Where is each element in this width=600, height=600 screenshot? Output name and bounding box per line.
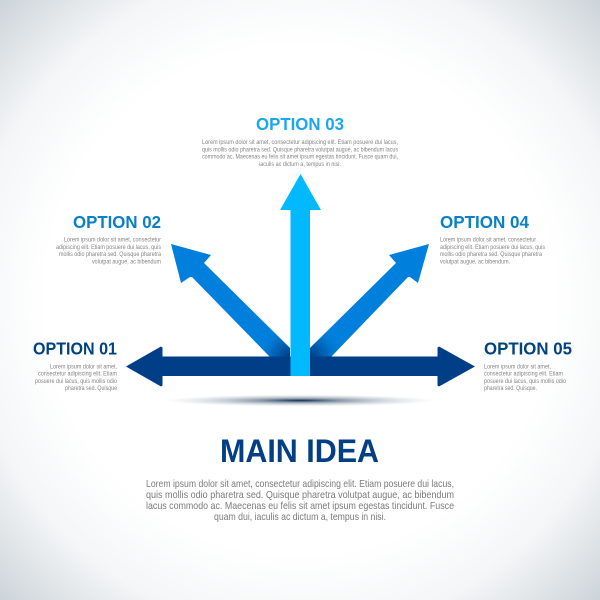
text block: option 03: quis mollis odio pharetra sed. Quisque pharetra volutpat augue, ac bibendum lacus [202, 146, 398, 153]
heading: option 02: OPTION 02 [73, 212, 161, 232]
heading: option 03: OPTION 03 [256, 114, 344, 134]
text block: option 05 [484, 363, 566, 392]
arrow: option 04 [310, 244, 429, 357]
text block: option 05: consectetur adipiscing elit. Etiam [484, 371, 563, 378]
panel: option 02 [56, 212, 162, 265]
arrow: option 03 [280, 174, 321, 376]
text block: option 01: pharetra sed. Quisque [65, 385, 117, 392]
text block: option 01 [35, 363, 117, 392]
heading: main idea: MAIN IDEA [220, 433, 379, 469]
heading: option 01: OPTION 01 [33, 338, 117, 358]
heading: option 05: OPTION 05 [484, 338, 572, 358]
text block: main idea: lacus commodo ac. Maecenas eu felis sit amet ipsum egestas tincidunt. Fusce [146, 501, 454, 512]
arrow: option 02 [171, 244, 290, 357]
text block: main idea: quam dui, iaculis ac dictum a, tempus in nisi. [214, 512, 386, 523]
arrow: options 01 and 05 [126, 346, 475, 386]
text block: main idea [146, 479, 454, 523]
text block: option 03: Lorem ipsum dolor sit amet, consectetur adipiscing elit. Etiam posuere dui lacus, [202, 139, 398, 146]
text block: option 03: iaculis ac dictum a, tempus in nisi. [259, 161, 341, 168]
text block: option 01: posuere dui lacus, quis mollis odio [35, 378, 117, 385]
text block: option 01: Lorem ipsum dolor sit amet, [50, 363, 117, 370]
text block: option 05: pharetra sed. Quisque. [484, 385, 537, 392]
panel: option 04 [440, 212, 545, 265]
text block: option 01: consectetur adipiscing elit. Etiam [38, 371, 117, 378]
text block: main idea: quis mollis odio pharetra sed. Quisque pharetra volutpat augue, ac bibendum [146, 490, 454, 501]
panel: main idea [146, 433, 454, 523]
ground shadow [165, 394, 435, 406]
text block: option 02: volutpat augue, ac bibendum [92, 258, 161, 265]
text block: option 05: posuere dui lacus, quis mollis odio [484, 378, 566, 385]
panel: option 01 [33, 338, 117, 392]
text block: option 04: adipiscing elit. Etiam posuere dui lacus, quis [440, 244, 545, 251]
text block: option 03: commodo ac. Maecenas eu felis sit amet ipsum egestas tincidunt. Fusce quam dui, [202, 154, 398, 161]
text block: option 02: adipiscing elit. Etiam posuere dui lacus, quis [56, 244, 161, 251]
text block: option 02 [56, 236, 162, 265]
text block: main idea: Lorem ipsum dolor sit amet, consectetur adipiscing elit. Etiam posuere dui lacus, [146, 479, 454, 490]
heading: option 04: OPTION 04 [440, 212, 529, 232]
text block: option 04: Lorem ipsum dolor sit amet, consectetur [440, 236, 537, 244]
text block: option 03 [202, 139, 398, 168]
arrow diagram [126, 174, 475, 406]
text block: option 02: mollis odio pharetra sed. Quisque pharetra [59, 251, 161, 258]
text block: option 04: volutpat augue, ac bibendum. [440, 258, 510, 265]
text block: option 04: mollis odio pharetra sed. Quisque pharetra [440, 251, 542, 258]
panel: option 03 [202, 114, 398, 168]
text block: option 04 [440, 236, 545, 265]
panel: option 05 [484, 338, 572, 392]
text block: option 05: Lorem ipsum dolor sit amet, [484, 363, 551, 370]
text block: option 02: Lorem ipsum dolor sit amet, consectetur [64, 236, 162, 244]
